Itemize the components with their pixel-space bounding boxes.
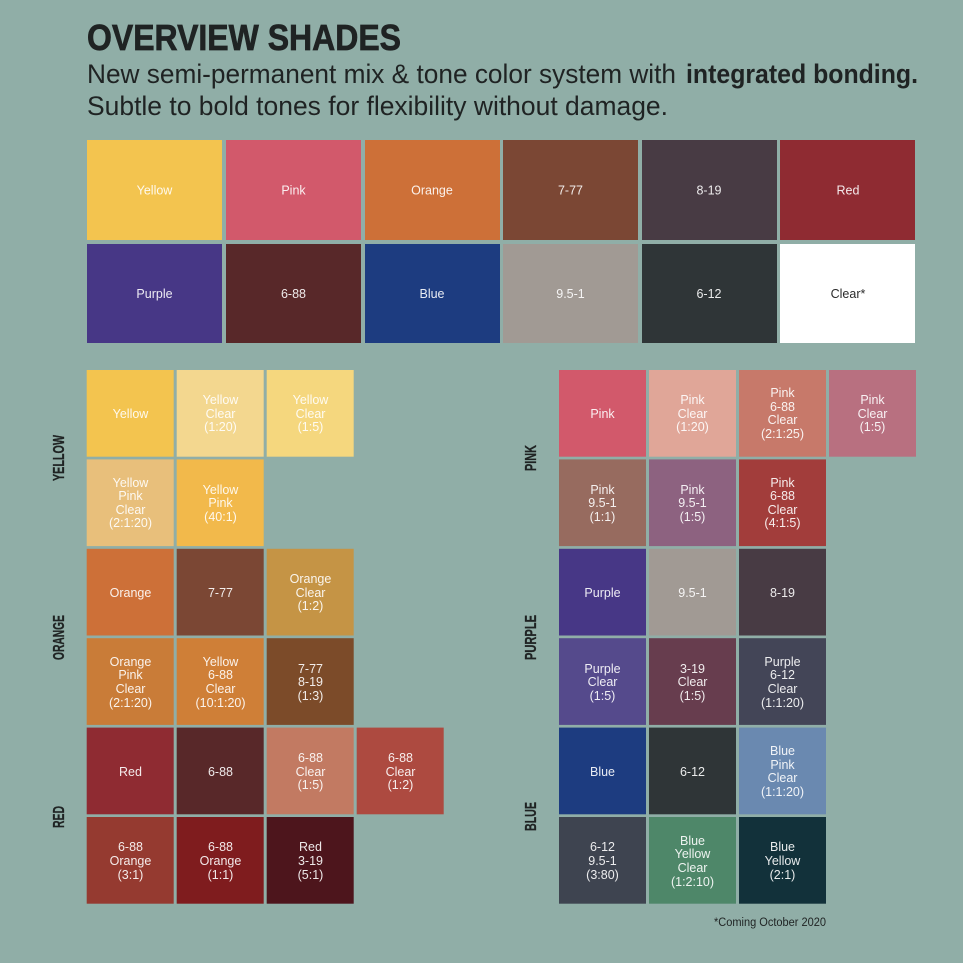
- cell: Pink 9.5-1 1:5: [649, 459, 736, 546]
- cell: 7-77 8-19: 8-19: [298, 675, 323, 689]
- cell: 6-88: 6-88: [208, 765, 233, 779]
- cell: 6-88 Clear 1:5: 6-88: [298, 751, 323, 765]
- cell: Blue Yellow Clear: (1:2:10): [671, 875, 714, 889]
- swatch: Blue: [365, 244, 500, 343]
- cell: Yellow Pink Clear: Pink: [118, 489, 143, 503]
- cell: 6-12: 6-12: [680, 765, 705, 779]
- cell: Pink 6-88 Clear 2:1:25: Clear: [768, 413, 797, 427]
- cell: Blue Pink Clear: Blue: [770, 744, 795, 758]
- panel: left mix grid: [87, 370, 444, 904]
- cell: 6-12 9.5-1: 9.5-1: [588, 854, 617, 868]
- cell: Orange Clear: Clear: [296, 586, 325, 600]
- cell: Pink Clear 1:20: (1:20): [676, 420, 709, 434]
- cell: 6-88 Orange 3:1: (3:1): [118, 868, 143, 882]
- cell: Blue: Blue: [590, 765, 615, 779]
- swatch: Red: Red: [837, 184, 860, 198]
- cell: Pink 6-88 Clear 4:1:5: Pink: [770, 476, 795, 490]
- cell: Purple: [559, 549, 646, 636]
- cell: Yellow 6-88 Clear: 6-88: [208, 668, 233, 682]
- cell: Orange Clear: [267, 549, 354, 636]
- cell: Blue Yellow Clear: [649, 817, 736, 904]
- cell: Red: Red: [119, 765, 142, 779]
- cell: Yellow Clear 1:5: Yellow: [293, 393, 329, 407]
- cell: Red 3-19: [267, 817, 354, 904]
- cell: 7-77 8-19: [267, 638, 354, 725]
- cell: Red: [87, 728, 174, 814]
- cell: 6-88 Clear 1:5: (1:5): [298, 778, 323, 792]
- cell: 6-88 Clear 1:2: (1:2): [388, 778, 413, 792]
- cell: Yellow: [87, 370, 174, 457]
- footnote: *Coming October 2020: [714, 917, 826, 929]
- swatch: 7-77: [503, 140, 638, 240]
- cell: Yellow 6-88 Clear: [177, 638, 264, 725]
- cell: Pink Clear 1:5: Pink: [860, 393, 885, 407]
- cell: 6-88 Clear 1:5: [267, 728, 354, 814]
- cell: Orange Clear: (1:2): [298, 599, 323, 613]
- cell: Yellow Clear 1:20: (1:20): [204, 420, 237, 434]
- cell: Pink: [559, 370, 646, 457]
- cell: Orange: Orange: [110, 586, 151, 600]
- cell: Yellow Clear 1:20: Yellow: [203, 393, 239, 407]
- cell: Pink 9.5-1 1:5: (1:5): [680, 510, 705, 524]
- cell: Pink 9.5-1 1:1: 9.5-1: [588, 496, 617, 510]
- swatch: Yellow: [87, 140, 222, 240]
- cell: Yellow Pink Clear: (2:1:20): [109, 516, 152, 530]
- cell: Purple 6-12 Clear: [739, 638, 826, 725]
- cell: 7-77 8-19: 7-77: [298, 662, 323, 676]
- cell: Pink Clear 1:20: [649, 370, 736, 457]
- swatch: 6-12: [642, 244, 777, 343]
- swatch: 8-19: 8-19: [696, 184, 722, 198]
- cell: Pink Clear 1:5: Clear: [858, 407, 887, 421]
- subtitle: [87, 59, 918, 121]
- cell: 6-88 Clear 1:2: [357, 728, 444, 814]
- swatch: Orange: [365, 140, 500, 240]
- cell: Purple Clear: [559, 638, 646, 725]
- cell: Pink 6-88 Clear 4:1:5: [739, 459, 826, 546]
- cell: Blue Yellow 2:1: Blue: [770, 840, 795, 854]
- cell: 7-77 8-19: (1:3): [298, 689, 323, 703]
- cell: Red 3-19: Red: [299, 840, 322, 854]
- title: OVERVIEW SHADES: [87, 17, 401, 58]
- cell: 6-12: [649, 728, 736, 814]
- cell: Yellow Pink 40:1: [177, 459, 264, 546]
- cell: Purple Clear: (1:5): [590, 689, 615, 703]
- cell: Yellow Pink Clear: Clear: [116, 503, 145, 517]
- cell: 6-88 Orange 3:1: [87, 817, 174, 904]
- cell: 6-88 Clear 1:5: Clear: [296, 765, 325, 779]
- cell: Pink 6-88 Clear 4:1:5: 6-88: [770, 489, 795, 503]
- cell: Pink 6-88 Clear 2:1:25: Pink: [770, 386, 795, 400]
- cell: 6-88 Orange 3:1: Orange: [110, 854, 151, 868]
- cell: 7-77: 7-77: [208, 586, 233, 600]
- swatch: 6-88: [226, 244, 361, 343]
- cell: Yellow Clear 1:5: (1:5): [298, 420, 323, 434]
- cell: Yellow Pink 40:1: Pink: [208, 496, 233, 510]
- cell: Pink Clear 1:20: Pink: [680, 393, 705, 407]
- cell: Purple 6-12 Clear: (1:1:20): [761, 696, 804, 710]
- swatch: Pink: [226, 140, 361, 240]
- cell: Purple 6-12 Clear: 6-12: [770, 668, 795, 682]
- swatch: Purple: [87, 244, 222, 343]
- cell: Pink Clear 1:20: Clear: [678, 407, 707, 421]
- cell: Pink 9.5-1 1:1: Pink: [590, 483, 615, 497]
- cell: Purple Clear: Purple: [584, 662, 621, 676]
- cell: Orange Pink Clear: Orange: [110, 655, 151, 669]
- cell: Blue Pink Clear: [739, 728, 826, 814]
- cell: 3-19 Clear: (1:5): [680, 689, 705, 703]
- cell: 3-19 Clear: [649, 638, 736, 725]
- cell: Pink 6-88 Clear 4:1:5: Clear: [768, 503, 797, 517]
- subtitle: New semi-permanent mix & tone color system with: [87, 59, 676, 89]
- swatch: 6-88: 6-88: [281, 287, 306, 301]
- cell: Orange Pink Clear: [87, 638, 174, 725]
- subtitle: Subtle to bold tones for flexibility without damage.: [87, 91, 668, 121]
- cell: Blue Yellow 2:1: Yellow: [765, 854, 801, 868]
- cell: 6-88 Orange 1:1: 6-88: [208, 840, 233, 854]
- cell: Orange Pink Clear: Clear: [116, 682, 145, 696]
- cell: Yellow 6-88 Clear: Yellow: [203, 655, 239, 669]
- cell: Blue: [559, 728, 646, 814]
- cell: Pink 6-88 Clear 2:1:25: (2:1:25): [761, 427, 804, 441]
- cell: Blue Yellow 2:1: (2:1): [770, 868, 795, 882]
- cell: 6-12 9.5-1: 6-12: [590, 840, 615, 854]
- cell: Pink 9.5-1 1:5: 9.5-1: [678, 496, 707, 510]
- cell: Blue Yellow Clear: Blue: [680, 834, 705, 848]
- cell: 6-88 Clear 1:2: Clear: [386, 765, 415, 779]
- swatch: Clear: [780, 244, 915, 343]
- label: RED: RED: [51, 806, 68, 828]
- cell: Blue Pink Clear: Pink: [770, 758, 795, 772]
- swatch: 7-77: 7-77: [558, 184, 583, 198]
- cell: 8-19: 8-19: [770, 586, 795, 600]
- cell: Blue Yellow Clear: Yellow: [675, 847, 711, 861]
- cell: Yellow 6-88 Clear: (10:1:20): [195, 696, 246, 710]
- cell: Purple 6-12 Clear: Clear: [768, 682, 797, 696]
- cell: 6-88 Orange 1:1: [177, 817, 264, 904]
- cell: Pink Clear 1:5: (1:5): [860, 420, 885, 434]
- cell: Pink: Pink: [590, 407, 615, 421]
- cell: Yellow Clear 1:20: Clear: [206, 407, 235, 421]
- cell: Purple 6-12 Clear: Purple: [764, 655, 801, 669]
- cell: Pink Clear 1:5: [829, 370, 916, 457]
- cell: 6-88: [177, 728, 264, 814]
- cell: Pink 6-88 Clear 2:1:25: [739, 370, 826, 457]
- cell: Blue Pink Clear: (1:1:20): [761, 785, 804, 799]
- cell: Orange Pink Clear: Pink: [118, 668, 143, 682]
- swatch: Orange: Orange: [411, 184, 453, 198]
- cell: Yellow: Yellow: [113, 407, 149, 421]
- cell: Pink 9.5-1 1:1: [559, 459, 646, 546]
- cell: Pink 6-88 Clear 2:1:25: 6-88: [770, 400, 795, 414]
- cell: Yellow Pink 40:1: Yellow: [203, 483, 239, 497]
- cell: Pink 6-88 Clear 4:1:5: (4:1:5): [764, 516, 801, 530]
- cell: 6-88 Clear 1:2: 6-88: [388, 751, 413, 765]
- panel: overview swatches: [87, 140, 915, 343]
- cell: 6-88 Orange 1:1: Orange: [200, 854, 241, 868]
- cell: Blue Yellow Clear: Clear: [678, 861, 707, 875]
- panel: right mix grid: [559, 370, 916, 904]
- cell: Yellow Pink Clear: [87, 459, 174, 546]
- cell: Orange: [87, 549, 174, 636]
- label: YELLOW: YELLOW: [51, 435, 68, 481]
- label: ORANGE: ORANGE: [51, 615, 68, 660]
- cell: 6-12 9.5-1: (3:80): [586, 868, 619, 882]
- cell: Yellow Clear 1:20: [177, 370, 264, 457]
- swatch: Yellow: Yellow: [137, 184, 173, 198]
- cell: Purple Clear: Clear: [588, 675, 617, 689]
- label: PINK: PINK: [523, 444, 540, 471]
- swatch: 6-12: 6-12: [696, 287, 722, 301]
- cell: Yellow Clear 1:5: Clear: [296, 407, 325, 421]
- cell: Pink 9.5-1 1:1: (1:1): [590, 510, 615, 524]
- cell: Red 3-19: 3-19: [298, 854, 323, 868]
- swatch: 8-19: [642, 140, 777, 240]
- cell: 3-19 Clear: 3-19: [680, 662, 705, 676]
- cell: Orange Pink Clear: (2:1:20): [109, 696, 152, 710]
- label: PURPLE: PURPLE: [523, 615, 540, 660]
- cell: Pink 9.5-1 1:5: Pink: [680, 483, 705, 497]
- cell: Blue Pink Clear: Clear: [768, 771, 797, 785]
- cell: 6-88 Orange 1:1: (1:1): [208, 868, 233, 882]
- cell: 9.5-1: [649, 549, 736, 636]
- cell: 3-19 Clear: Clear: [678, 675, 707, 689]
- cell: Orange Clear: Orange: [290, 572, 331, 586]
- cell: Red 3-19: (5:1): [298, 868, 323, 882]
- cell: 9.5-1: 9.5-1: [678, 586, 707, 600]
- cell: Yellow Clear 1:5: [267, 370, 354, 457]
- cell: Purple: Purple: [584, 586, 621, 600]
- swatch: Purple: Purple: [136, 287, 173, 301]
- cell: 6-88 Orange 3:1: 6-88: [118, 840, 143, 854]
- cell: Yellow Pink Clear: Yellow: [113, 476, 149, 490]
- cell: 7-77: [177, 549, 264, 636]
- swatch: Blue: Blue: [419, 287, 445, 301]
- swatch: Clear: Clear*: [831, 287, 865, 301]
- cell: Yellow 6-88 Clear: Clear: [206, 682, 235, 696]
- cell: 6-12 9.5-1: [559, 817, 646, 904]
- cell: Blue Yellow 2:1: [739, 817, 826, 904]
- cell: 8-19: [739, 549, 826, 636]
- swatch: 9.5-1: [503, 244, 638, 343]
- subtitle: integrated bonding.: [686, 59, 918, 89]
- cell: Yellow Pink 40:1: (40:1): [204, 510, 237, 524]
- swatch: Pink: Pink: [281, 184, 306, 198]
- label: BLUE: BLUE: [523, 802, 540, 831]
- swatch: Red: [780, 140, 915, 240]
- swatch: 9.5-1: 9.5-1: [556, 287, 585, 301]
